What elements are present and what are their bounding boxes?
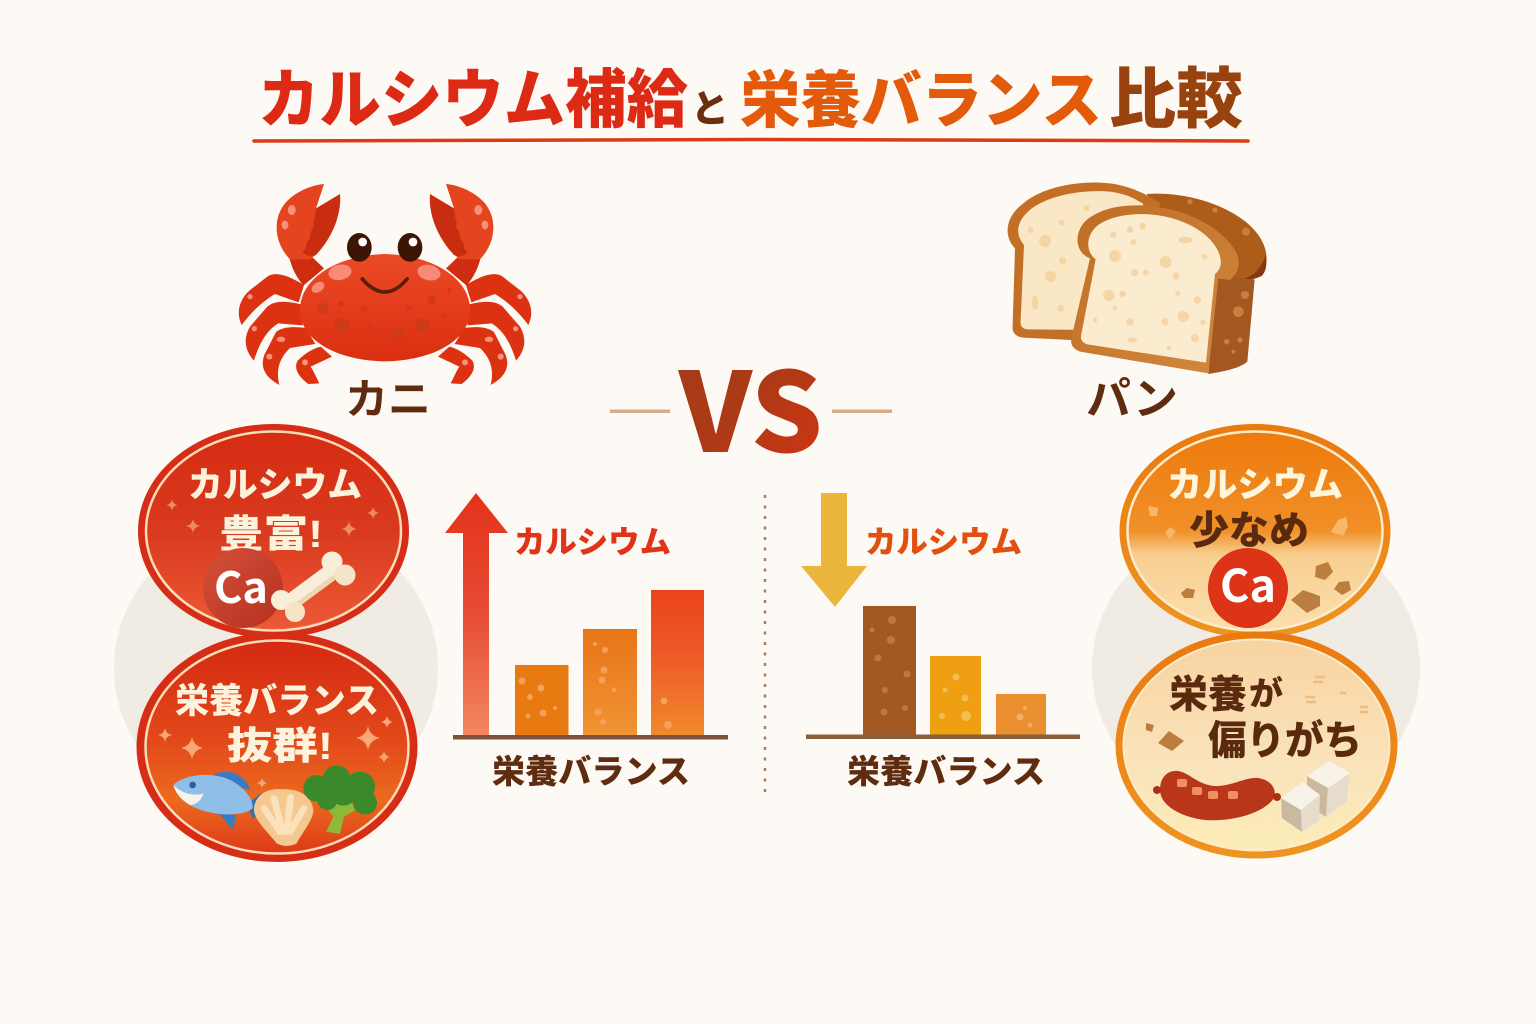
badge: nutrition balance excellent: 抜群! <box>227 726 333 768</box>
title <box>254 62 1248 141</box>
badge: calcium rich: カルシウム <box>188 466 362 505</box>
badge: calcium low: 少なめ <box>1189 510 1309 553</box>
panel: bread drawbacks <box>1092 424 1420 858</box>
badge: nutrition balance excellent: 栄養バランス <box>175 682 379 721</box>
arrow: calcium up <box>445 493 508 735</box>
icon: sausage <box>1153 771 1281 820</box>
arrow: calcium down <box>801 493 867 607</box>
bars <box>515 590 704 736</box>
label: nutrition balance: 栄養バランス <box>492 753 690 790</box>
badge: nutrition biased: 偏りがち <box>1208 718 1362 763</box>
panel: crab benefits <box>114 424 438 862</box>
axis <box>453 735 728 740</box>
title: と <box>691 89 729 131</box>
divider <box>764 495 766 792</box>
icon: sugar cubes <box>1281 761 1350 832</box>
badge: calcium rich: 豊富! <box>219 514 323 556</box>
VS mark <box>610 324 892 484</box>
axis <box>806 734 1080 739</box>
VS mark: VS <box>678 324 823 484</box>
icon: fish <box>173 772 264 829</box>
badge: nutrition biased: が <box>1249 675 1283 712</box>
chart: crab calcium and nutrition <box>445 493 728 790</box>
Ca mark: Ca <box>214 554 268 616</box>
title: カルシウム補給 <box>258 64 688 136</box>
chart: bread calcium and nutrition <box>801 493 1080 790</box>
badge: calcium low <box>1120 424 1390 638</box>
title: 栄養バランス <box>740 67 1102 136</box>
Ca mark <box>203 548 283 628</box>
label: calcium: カルシウム <box>865 525 1022 560</box>
badge: nutrition biased: 栄養 <box>1169 674 1247 717</box>
label: calcium: カルシウム <box>514 525 671 560</box>
label: nutrition balance: 栄養バランス <box>847 753 1045 790</box>
icon: shell <box>254 789 313 846</box>
icon: crab <box>239 184 531 385</box>
badge: nutrition biased <box>1116 632 1398 858</box>
label: crab: カニ <box>345 376 431 423</box>
Ca mark <box>1208 548 1288 628</box>
badge: nutrition balance excellent <box>136 632 418 862</box>
title: 比較 <box>1109 62 1243 136</box>
bars <box>863 606 1046 736</box>
badge: calcium low: カルシウム <box>1167 466 1343 505</box>
label: bread: パン <box>1086 375 1178 424</box>
icon: broccoli <box>303 765 377 834</box>
icon: bread <box>1008 183 1267 374</box>
Ca mark: Ca <box>1220 550 1276 615</box>
badge: calcium rich <box>138 424 409 638</box>
crumbs <box>1181 562 1351 613</box>
icon: bone <box>271 552 356 622</box>
